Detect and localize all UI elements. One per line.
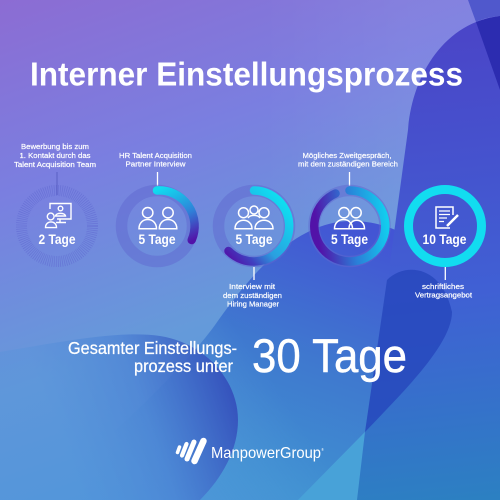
logo mark [178, 441, 204, 461]
step 2 label: Partner Interview [126, 160, 186, 168]
logo: ® [321, 448, 324, 452]
step 3: 5 Tage: 5 Tage [236, 231, 273, 247]
total label [68, 338, 237, 376]
step 3 label: Interview mit [229, 282, 276, 291]
step 3: 5 Tage [218, 190, 290, 308]
icon: two people overlapping [334, 208, 364, 229]
step 5 ring [408, 190, 482, 262]
total value: 30 Tage [252, 329, 407, 382]
icon: contract [436, 207, 458, 228]
step 1: 2 Tage: 2 Tage [38, 231, 76, 247]
step 1 label: 1. Kontakt durch das [20, 151, 91, 160]
step 5 label [415, 282, 473, 300]
step 4: 5 Tage: 5 Tage [331, 231, 368, 247]
icon: two people [139, 208, 177, 229]
step 1 label: Bewerbung bis zum [21, 142, 89, 151]
step 4 ring [314, 190, 385, 262]
icon: three people [235, 206, 273, 229]
step 1 label: Talent Acquisition Team [14, 160, 96, 169]
step 3 label [223, 282, 282, 308]
step 4 label: Mögliches Zweitgespräch, [302, 151, 392, 160]
step 4: 5 Tage [298, 151, 398, 262]
step 3 label: dem zuständigen [223, 291, 282, 300]
title: Interner Einstellungsprozess [30, 56, 463, 92]
step 2: 5 Tage [119, 151, 195, 262]
total label: prozess unter [134, 356, 233, 376]
step 1 ring [22, 190, 92, 262]
total label: Gesamter Einstellungs- [68, 338, 237, 358]
step 4 label: mit dem zuständigen Bereich [298, 160, 398, 168]
step 5: 10 Tage: 10 Tage [422, 231, 467, 247]
logo [178, 441, 324, 462]
step 2 ring [122, 190, 192, 262]
step 1 label [14, 142, 96, 169]
step 3 label: Hiring Manager [227, 300, 279, 308]
logo: ManpowerGroup [211, 445, 321, 462]
step 1: 2 Tage [14, 142, 96, 262]
step 4 label [298, 151, 398, 168]
step 5: 10 Tage [408, 190, 482, 300]
step 3 ring [218, 190, 290, 262]
step 2: 5 Tage: 5 Tage [138, 231, 176, 247]
icon: video interview [46, 204, 71, 228]
step 5 label: Vertragsangebot [415, 290, 473, 300]
step 5 label: schriftliches [422, 282, 464, 291]
step 2 label [119, 151, 192, 168]
step 2 label: HR Talent Acquisition [119, 151, 192, 160]
